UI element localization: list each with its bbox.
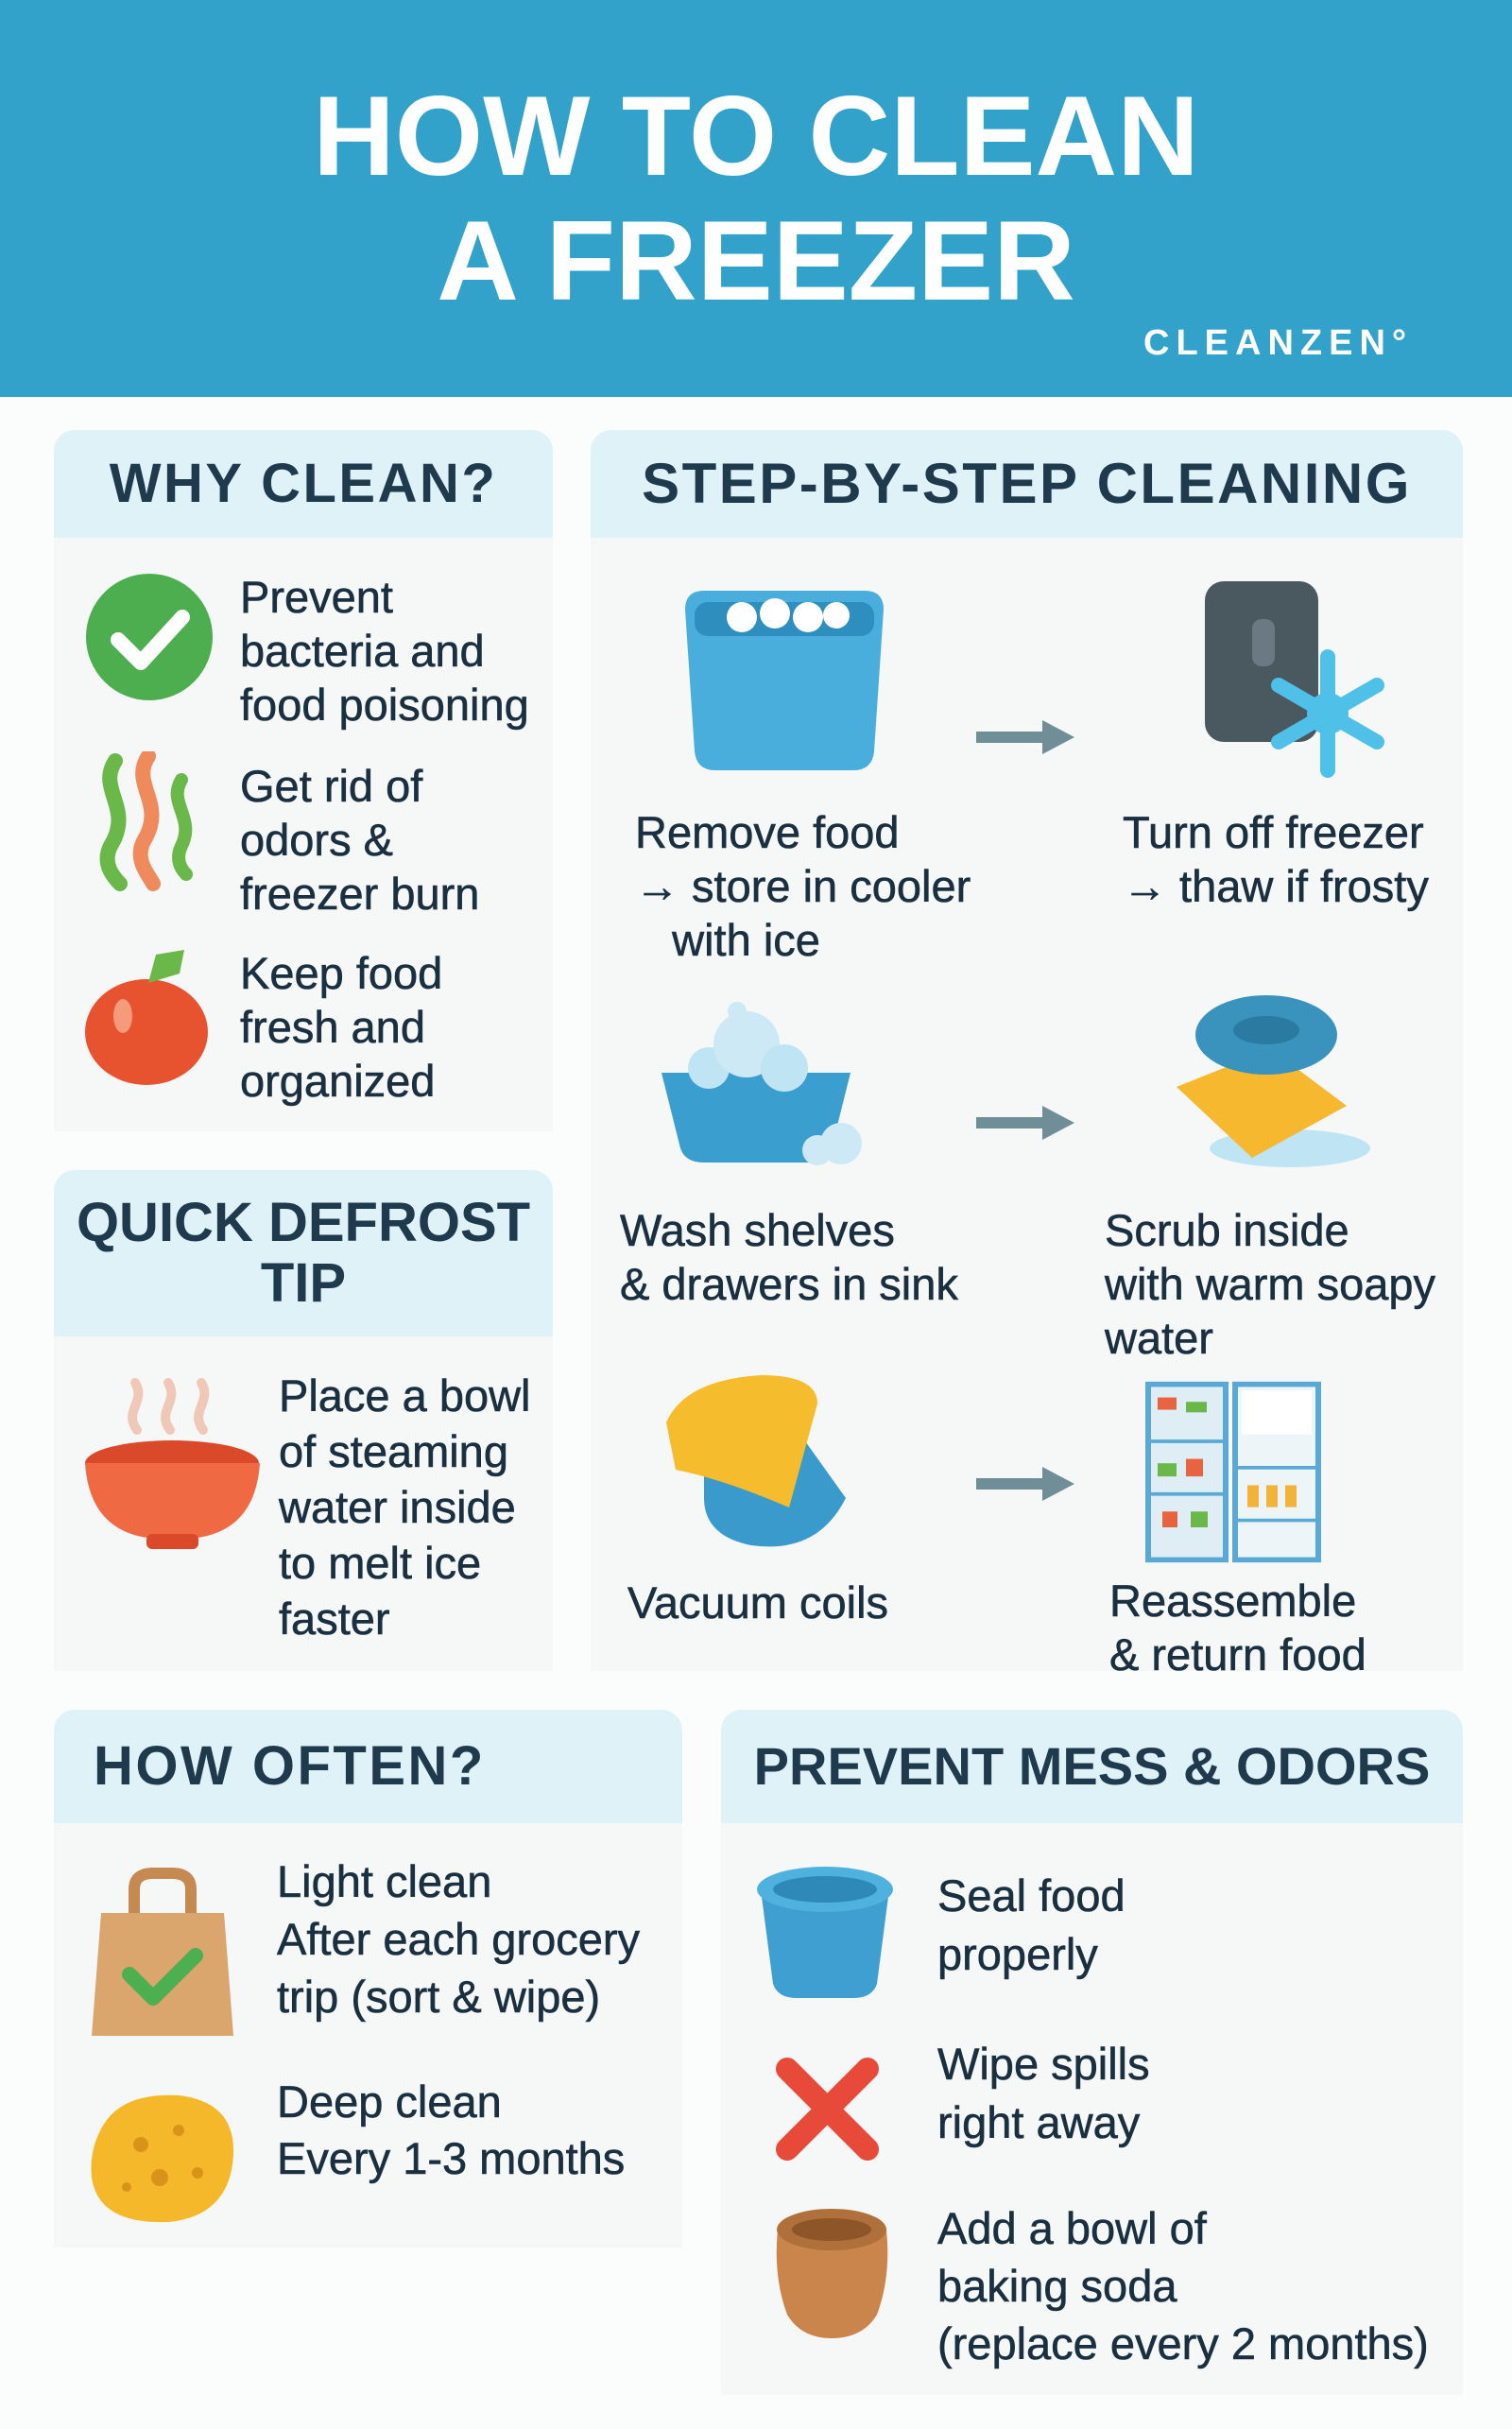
text: scrub inside: with warm soapy bbox=[1105, 1259, 1435, 1309]
text: baking soda: baking soda bbox=[937, 2261, 1177, 2311]
icon: freezer off with snowflake bbox=[1205, 581, 1384, 778]
icon: grocery bag bbox=[92, 1868, 233, 2036]
icon: fridge bbox=[1145, 1382, 1321, 1563]
text: wipe spills: right away bbox=[937, 2097, 1140, 2147]
text: keep fresh: fresh and bbox=[240, 1002, 425, 1052]
icon: check bbox=[86, 574, 213, 700]
text: keep fresh: organized bbox=[240, 1056, 435, 1106]
heading: why clean bbox=[54, 430, 553, 538]
text: scrub inside: water bbox=[1105, 1313, 1213, 1363]
text: scrub inside bbox=[1104, 1205, 1436, 1363]
title bbox=[313, 73, 1199, 324]
panel: why clean bbox=[54, 430, 553, 1131]
panel: prevent mess bbox=[721, 1710, 1463, 2395]
text: turn off: → thaw if frosty bbox=[1123, 861, 1429, 911]
heading: quick defrost bbox=[54, 1170, 553, 1336]
icon: food box bbox=[685, 591, 884, 770]
text: turn off bbox=[1123, 807, 1429, 911]
panel: quick defrost tip bbox=[54, 1170, 553, 1671]
icon: brush bbox=[1177, 995, 1370, 1167]
heading: prevent mess: PREVENT MESS & ODORS bbox=[754, 1736, 1430, 1796]
arrow 2 bbox=[976, 1106, 1074, 1140]
text: light clean bbox=[276, 1856, 641, 2023]
text: reassemble: Reassemble bbox=[1109, 1576, 1356, 1626]
text: defrost tip: water inside bbox=[279, 1482, 516, 1532]
text: defrost tip: Place a bowl bbox=[279, 1370, 531, 1421]
text: deep clean: Every 1-3 months bbox=[277, 2133, 625, 2183]
heading: why clean: WHY CLEAN? bbox=[110, 453, 497, 514]
text: remove food: Remove food bbox=[635, 807, 900, 857]
text: deep clean: Deep clean bbox=[277, 2076, 502, 2127]
text: prevent bacteria: bacteria and bbox=[240, 626, 485, 676]
text: baking soda: (replace every 2 months) bbox=[937, 2318, 1429, 2369]
text: reassemble: & return food bbox=[1109, 1629, 1366, 1680]
text: wipe spills: Wipe spills bbox=[937, 2039, 1150, 2089]
text: reassemble bbox=[1109, 1576, 1366, 1680]
text: prevent bacteria: Prevent bbox=[240, 572, 393, 622]
heading: quick defrost: TIP bbox=[261, 1252, 346, 1314]
text: keep fresh: Keep food bbox=[240, 948, 442, 998]
title: HOW TO CLEAN bbox=[313, 73, 1199, 199]
heading: quick defrost: QUICK DEFROST bbox=[77, 1192, 530, 1253]
text: odors: odors & bbox=[240, 815, 393, 865]
text: odors: Get rid of bbox=[240, 761, 422, 811]
text: light clean: After each grocery bbox=[277, 1914, 640, 1964]
text: defrost tip: faster bbox=[279, 1593, 390, 1644]
text: defrost tip: of steaming bbox=[279, 1426, 508, 1476]
text: baking soda: Add a bowl of bbox=[937, 2203, 1207, 2253]
text: light clean: Light clean bbox=[277, 1856, 491, 1906]
heading: steps bbox=[591, 430, 1463, 538]
icon: container bbox=[757, 1867, 893, 1998]
text: light clean: trip (sort & wipe) bbox=[277, 1972, 600, 2022]
text: seal food: properly bbox=[937, 1929, 1098, 1979]
panel: step by step bbox=[591, 430, 1463, 1671]
heading: steps: STEP-BY-STEP CLEANING bbox=[642, 452, 1412, 515]
text: wash shelves: Wash shelves bbox=[620, 1205, 895, 1255]
arrow 3 bbox=[976, 1467, 1074, 1501]
text: defrost tip: to melt ice bbox=[279, 1538, 481, 1588]
icon: sponge bbox=[91, 2094, 234, 2223]
text: seal food: Seal food bbox=[937, 1870, 1125, 1921]
icon: tub with suds bbox=[662, 1002, 862, 1165]
title: A FREEZER bbox=[437, 198, 1075, 324]
text: deep clean bbox=[277, 2076, 625, 2183]
text: remove food: with ice bbox=[672, 915, 820, 965]
heading: how often: HOW OFTEN? bbox=[94, 1735, 486, 1797]
icon: steaming bowl bbox=[85, 1378, 260, 1549]
icon: baking soda pot bbox=[777, 2209, 888, 2338]
brand logo: CLEANZEN° bbox=[1143, 323, 1413, 363]
icon: vacuum cloth bbox=[666, 1375, 846, 1546]
text: odors: freezer burn bbox=[240, 869, 479, 919]
icon: apple bbox=[85, 950, 208, 1085]
text: prevent bacteria bbox=[240, 572, 529, 730]
text: odors bbox=[240, 761, 479, 919]
text: wash shelves bbox=[620, 1205, 958, 1309]
icon: red X bbox=[776, 2058, 879, 2161]
text: scrub inside: Scrub inside bbox=[1105, 1205, 1349, 1255]
text: remove food bbox=[635, 807, 971, 965]
text: keep fresh bbox=[240, 948, 442, 1106]
text: remove food: → store in cooler bbox=[635, 861, 971, 911]
text: wipe spills bbox=[937, 2039, 1150, 2147]
heading: how often bbox=[54, 1710, 682, 1823]
text: seal food bbox=[937, 1870, 1125, 1979]
text: defrost tip bbox=[278, 1370, 531, 1644]
header banner bbox=[0, 0, 1512, 397]
icon: odor waves bbox=[100, 751, 193, 891]
text: turn off: Turn off freezer bbox=[1123, 807, 1424, 857]
text: prevent bacteria: food poisoning bbox=[240, 680, 529, 730]
text: wash shelves: & drawers in sink bbox=[620, 1259, 958, 1309]
text: baking soda bbox=[937, 2203, 1429, 2369]
heading: prevent mess bbox=[721, 1710, 1463, 1823]
arrow 1 bbox=[976, 720, 1074, 754]
panel: how often bbox=[54, 1710, 682, 2248]
text: vacuum coils: Vacuum coils bbox=[627, 1577, 888, 1628]
